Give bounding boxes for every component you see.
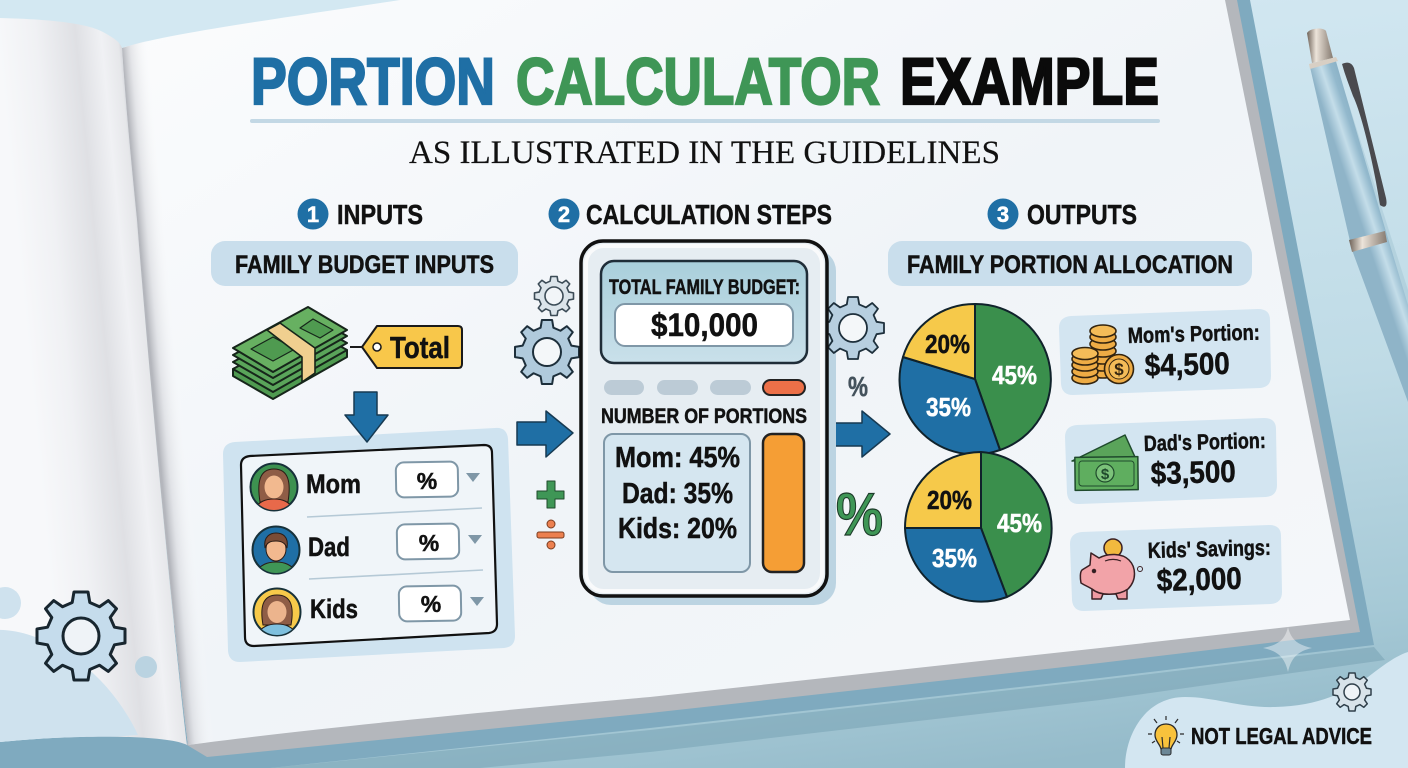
pie chart: bottom [905,452,1052,602]
pie chart: bottom: 20% [927,485,972,515]
heading: 1 inputs: 1 [307,202,319,227]
pie chart: top: 45% [992,360,1037,390]
icon: coins: $ [1114,360,1124,379]
heading: 1 inputs [298,198,423,230]
subtitle: AS ILLUSTRATED IN THE GUIDELINES [409,135,1000,171]
calculator shadow [589,249,836,605]
calculator display: TOTAL FAMILY BUDGET: [609,276,800,299]
title: CALCULATOR [516,44,880,118]
pen clip [1342,63,1387,207]
heading: 3 outputs: OUTPUTS [1027,199,1137,230]
pie chart: top: 35% [926,392,971,422]
portions list [604,434,750,572]
card: kids' savings [1070,525,1282,611]
orange bar [763,434,804,572]
book cover shadow on desk [270,647,1385,768]
heading: 3 outputs [988,198,1137,230]
pen tip [1307,29,1333,63]
icon: total tag: Total [390,330,450,365]
row: mom [250,461,480,511]
pen ring [1349,231,1387,252]
pen collar [1309,57,1338,69]
portions list: Mom: 45% [615,442,740,474]
row: kids [254,585,484,636]
calculator display [601,261,807,363]
row: mom: % [417,468,437,494]
pen body [1310,58,1408,402]
icon: total tag [350,326,462,368]
icon: stack of cash [233,307,347,399]
card: mom's portion [1059,309,1271,395]
sparkle [1263,627,1312,672]
subheading: family budget inputs [211,241,518,286]
arrow: out of calculator [835,411,890,457]
calculator buttons [604,380,805,395]
heading: 1 inputs: INPUTS [337,199,423,230]
icon: small percent: % [848,371,868,402]
row: mom: Mom [306,469,361,499]
title: EXAMPLE [900,44,1159,118]
row: dad: Dad [308,532,350,562]
title: PORTION [251,44,495,118]
icon: piggy bank [1080,539,1142,599]
icon: plus sign [537,481,564,508]
card: dad's portion: Dad's Portion: [1143,428,1266,456]
panel: family member inputs [223,428,515,662]
row: dad: % [419,530,439,556]
portions list: Kids: 20% [618,513,737,545]
icon: coins [1072,325,1134,384]
subheading: family budget inputs: FAMILY BUDGET INPUTS [235,251,494,279]
icon: green percent: % [836,481,883,548]
calculator [581,241,827,596]
icon: light bulb [1148,716,1184,755]
number of portions label: NUMBER OF PORTIONS [601,405,807,428]
icon: bottom-right gear [1333,673,1371,711]
pie chart: top: 20% [925,329,970,359]
card: mom's portion: Mom's Portion: [1127,320,1260,348]
pie chart: top [900,304,1051,454]
row: kids: % [421,591,441,617]
card: mom's portion: $4,500 [1144,346,1230,383]
heading: 3 outputs: 3 [997,202,1009,227]
icon: dollar bills: $ [1101,466,1110,483]
icon: large gear on left page [37,592,125,680]
spine shadow [122,39,218,745]
card: kids' savings: $2,000 [1156,561,1242,598]
arrow: down [345,392,388,442]
pen shadow [1338,70,1408,330]
icon: medium gear [515,320,579,384]
heading: 2 calculation steps: 2 [558,202,570,227]
card: dad's portion [1065,418,1277,504]
paper band [267,323,315,382]
card: kids' savings: Kids' Savings: [1147,535,1271,563]
arrow: into calculator [517,411,573,457]
subheading: family portion allocation: FAMILY PORTION ALLOCATION [907,251,1233,279]
subheading: family portion allocation [888,241,1252,286]
calculator display: $10,000 [651,307,758,343]
left page [0,18,187,745]
decorative blob: bottom right [1125,652,1408,768]
pen [1307,29,1408,402]
heading: 2 calculation steps: CALCULATION STEPS [586,199,832,230]
icon: small gear [534,276,574,316]
row: dad [252,523,482,574]
pie chart: bottom: 45% [997,508,1042,538]
portions list: Dad: 35% [622,478,733,510]
icon: right gear [822,297,884,359]
left page decorations [0,587,157,745]
icon: divide sign [537,520,564,549]
pie chart: bottom: 35% [932,543,977,573]
card: dad's portion: $3,500 [1150,454,1236,491]
member list card [241,445,497,646]
icon: dollar bills [1072,435,1138,490]
title [251,44,1159,118]
row: kids: Kids [310,594,358,624]
